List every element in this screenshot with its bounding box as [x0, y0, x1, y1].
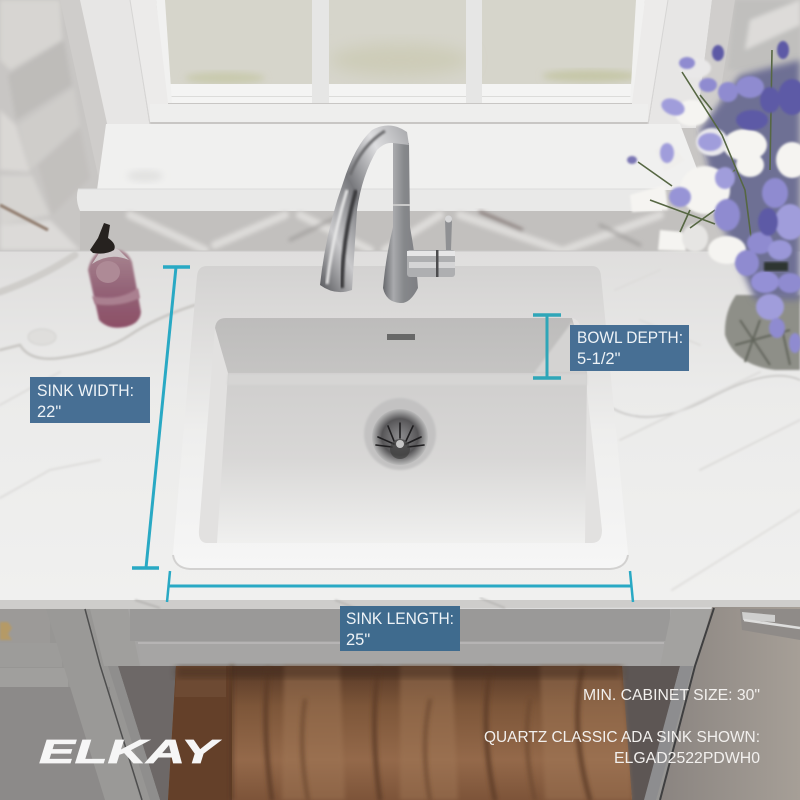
drain	[364, 398, 436, 470]
white petals	[630, 58, 800, 264]
note: minimum cabinet size: MIN. CABINET SIZE: 30"	[583, 687, 760, 704]
dark foliage mass	[700, 60, 800, 300]
window sill	[77, 124, 705, 211]
sink bowl	[199, 318, 602, 543]
callout: sink width	[30, 377, 150, 423]
faucet	[320, 125, 455, 303]
flowers and vase	[627, 41, 800, 370]
purple blooms	[627, 41, 800, 353]
callout: sink length: 25"	[346, 631, 370, 649]
marble wall background	[0, 0, 800, 255]
faucet handle	[407, 250, 455, 277]
window: outdoor view	[60, 0, 735, 185]
note: model shown: ELGAD2522PDWH0	[614, 750, 760, 767]
bottle pump	[90, 223, 115, 254]
cabinet knob	[0, 622, 12, 640]
callout: sink width: SINK WIDTH:	[37, 382, 134, 400]
callout: sink length	[340, 606, 460, 651]
logo: Elkay: ELKAY	[39, 733, 222, 770]
faucet base	[383, 143, 418, 303]
callout: bowl depth: 5-1/2"	[577, 350, 621, 368]
countertop	[0, 251, 800, 601]
appliance panel	[660, 607, 800, 800]
dimension line: sink width	[132, 267, 190, 568]
sink rim	[173, 266, 628, 569]
callout: sink width: 22"	[37, 403, 61, 421]
dimension line: bowl depth	[533, 315, 561, 378]
stems	[638, 50, 772, 245]
cabinet	[0, 607, 800, 800]
bowl back wall	[215, 318, 587, 373]
logo plate	[387, 334, 415, 340]
callout: bowl depth	[570, 325, 689, 371]
faucet spout	[320, 125, 409, 292]
bowl interior walls	[199, 318, 602, 543]
bowl floor	[217, 373, 587, 543]
backsplash	[80, 211, 700, 251]
countertop front edge	[0, 598, 800, 610]
note: model shown	[484, 729, 760, 767]
wood floor	[108, 666, 632, 800]
vase	[725, 295, 800, 370]
dimension line: sink length	[167, 571, 633, 602]
soap bottle	[88, 223, 141, 328]
note: model shown: QUARTZ CLASSIC ADA SINK SHOWN:	[484, 729, 760, 746]
callout: sink length: SINK LENGTH:	[346, 610, 454, 628]
callout: bowl depth: BOWL DEPTH:	[577, 329, 683, 347]
